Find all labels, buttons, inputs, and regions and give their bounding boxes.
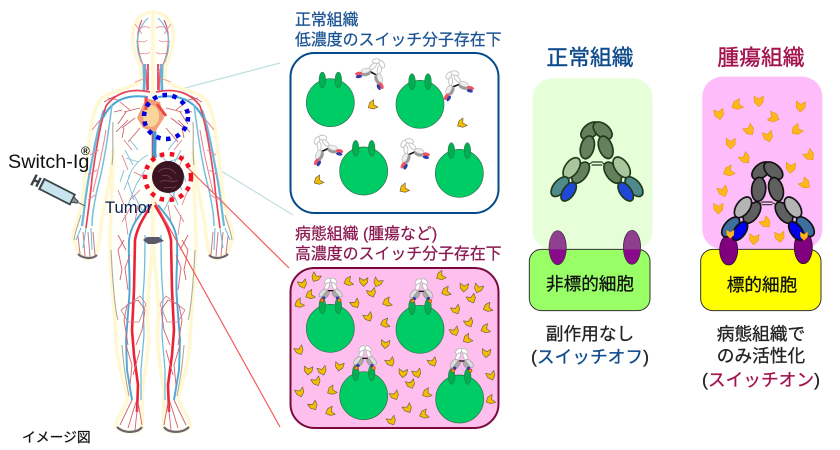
panel: normal tissue cells [290,51,498,213]
human body with blood vessels [73,12,233,432]
aorta [152,128,154,160]
pink tissue background [702,77,822,249]
panel: tumor tissue cells [290,268,498,428]
inactive antibody [548,118,646,204]
title: tumor tissue: 腫瘍組織 [717,45,805,70]
caption: no side effects [531,324,649,367]
Tumor label: Tumor [105,198,153,217]
label: non-target cell: 非標的細胞 [546,274,634,294]
caption: activated only in diseased tissue: 病態組織で [717,324,805,344]
tumor [152,161,184,193]
caption: activated only in diseased tissue [702,324,820,390]
connector: tumor lines [155,168,289,427]
heading: diseased tissue high switch concentration [295,225,502,263]
non-target cell [529,249,650,311]
groin shape [143,237,164,244]
panel: tumor tissue antibody diagram [701,77,822,311]
caption: no side effects: 副作用なし [546,324,634,344]
caption: activated only in diseased tissue: のみ活性化 [717,346,806,366]
heading: diseased tissue high switch concentration: 病態組織 (腫瘍など) [295,225,437,243]
pale green tissue background [533,78,653,250]
heading: normal tissue low switch concentration: 低濃度のスイッチ分子存在下 [295,31,502,49]
panel: normal tissue antibody diagram [529,78,653,311]
icon: syringe [31,174,88,212]
image caption: イメージ図 [22,430,91,445]
heading: normal tissue low switch concentration [295,11,502,49]
caption: activated only in diseased tissue: (スイッチオン) [702,370,820,390]
connector: normal tissue line [182,63,293,215]
label: target cell: 標的細胞 [727,275,797,295]
vena cava [154,130,155,158]
target cell [701,249,821,311]
blue dotted circle [144,95,188,139]
heading: diseased tissue high switch concentration: 高濃度のスイッチ分子存在下 [295,245,502,263]
cells, antibodies and switch molecules [303,51,483,197]
Switch-Ig label: ® [81,144,90,158]
cells, bound antibodies and switch molecules [293,270,497,427]
heading: normal tissue low switch concentration: 正常組織 [295,11,359,29]
caption: no side effects: (スイッチオフ) [531,347,649,367]
title: normal tissue: 正常組織 [546,45,634,70]
active antibody [718,158,818,243]
heart [137,97,166,132]
receptors [720,231,812,265]
bound switch molecules [727,230,808,241]
Switch-Ig label: Switch-Ig [8,151,89,173]
switch molecules [714,96,817,245]
receptors [549,230,641,265]
red dotted circle [145,154,191,200]
